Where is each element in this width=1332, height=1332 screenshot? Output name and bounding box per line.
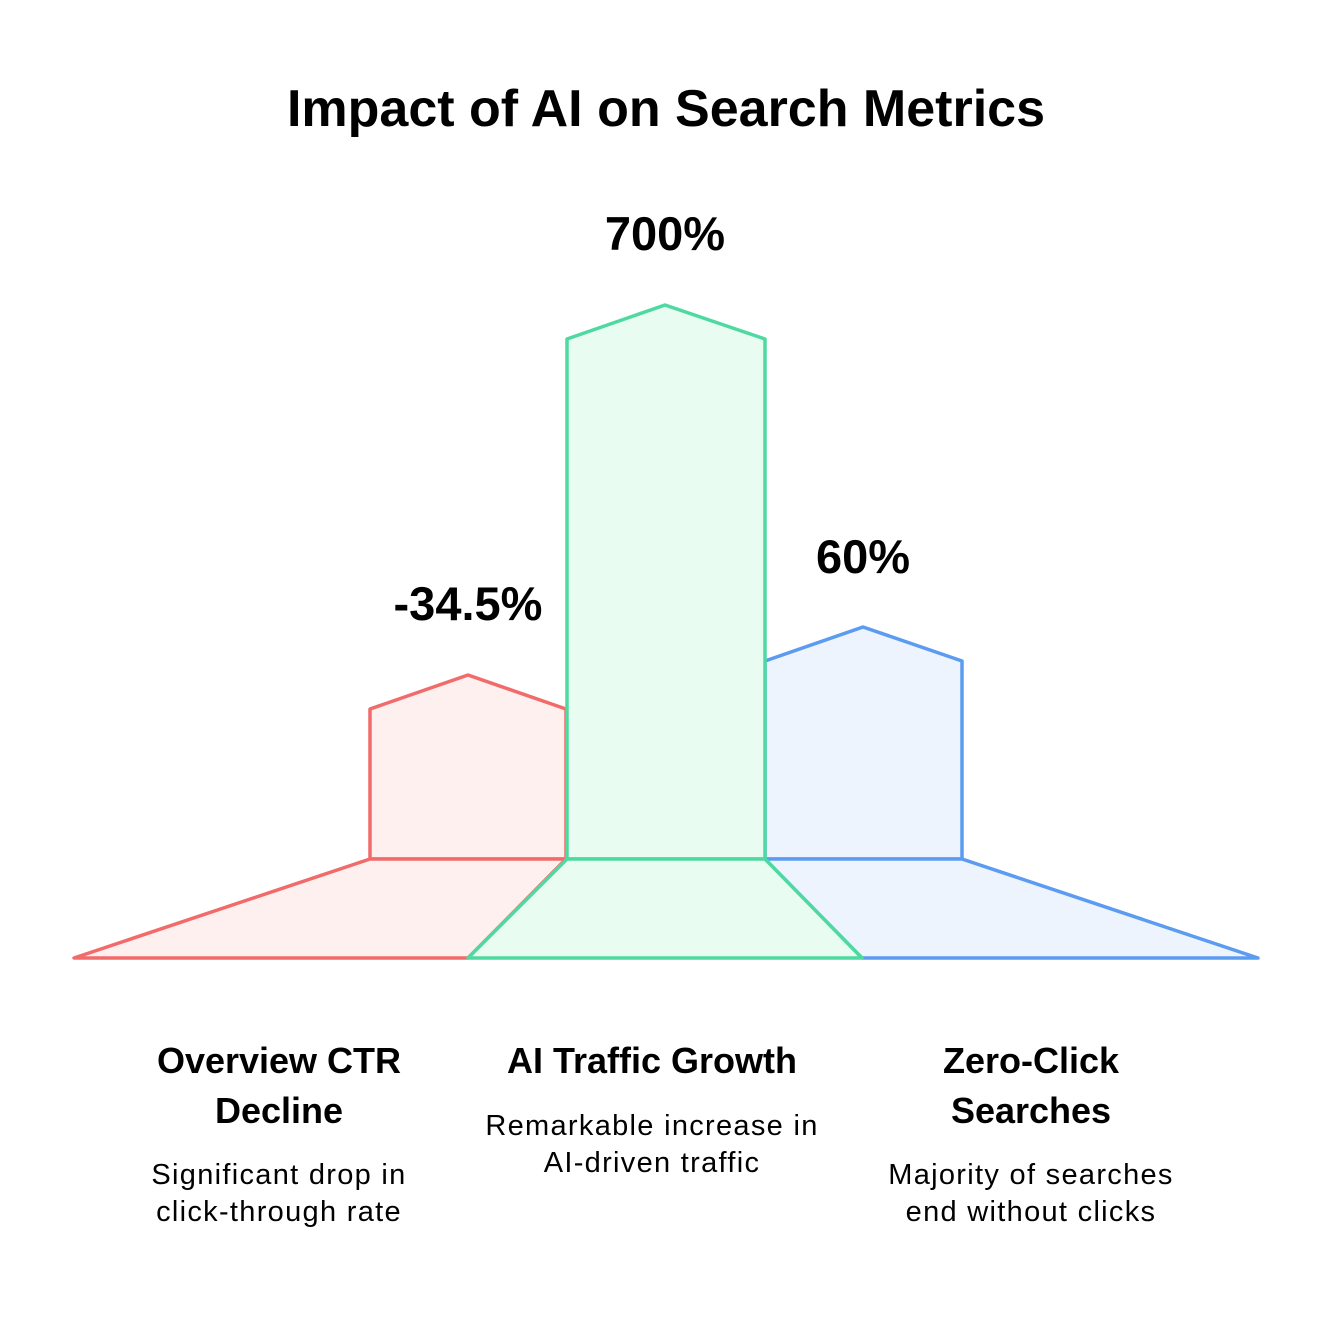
label: Zero-Click Searches: end without clicks [906,1196,1156,1228]
label: AI Traffic Growth: AI Traffic Growth [507,1040,797,1081]
value: -34.5%: -34.5% [394,577,542,630]
label: Overview CTR Decline: Significant drop in [151,1159,407,1191]
label: Zero-Click Searches [888,1040,1174,1228]
label: AI Traffic Growth [485,1040,819,1179]
label: Overview CTR Decline: Decline [215,1090,343,1131]
label: Overview CTR Decline [151,1040,407,1228]
label: AI Traffic Growth: AI-driven traffic [544,1147,760,1179]
label: Zero-Click Searches: Zero-Click [943,1040,1120,1081]
chart: green segment [468,305,862,958]
label: Overview CTR Decline: click-through rate [156,1196,402,1228]
label: Overview CTR Decline: Overview CTR [157,1040,401,1081]
chart: blue segment [765,627,1258,958]
value: 700%: 700% [605,207,725,260]
title: Impact of AI on Search Metrics [287,80,1045,138]
chart: red segment [74,675,566,958]
value: 60%: 60% [816,530,910,583]
label: Zero-Click Searches: Searches [951,1090,1111,1131]
label: Zero-Click Searches: Majority of searches [888,1159,1174,1191]
label: AI Traffic Growth: Remarkable increase in [485,1110,819,1142]
